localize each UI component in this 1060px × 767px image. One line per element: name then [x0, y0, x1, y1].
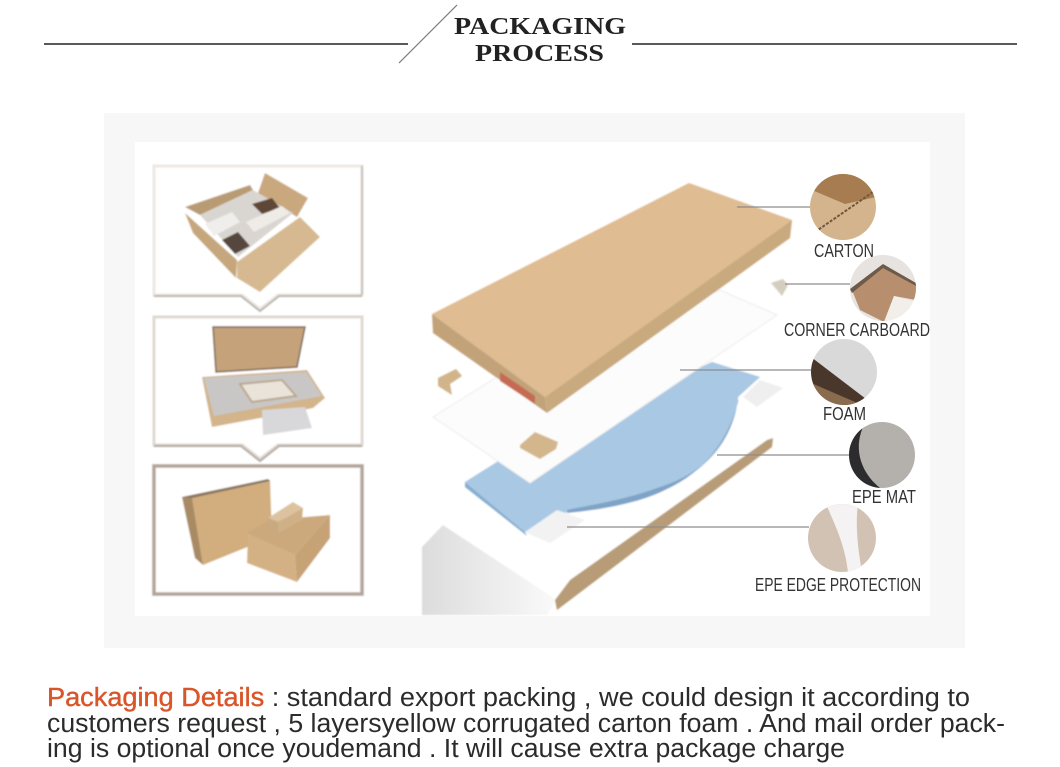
detail: carton: CARTON — [814, 241, 874, 261]
step 1 frame: open carton with goods — [154, 166, 362, 311]
detail: EPE mat: EPE MAT — [852, 487, 916, 507]
detail: corner carboard — [784, 255, 930, 340]
heading: packaging process: PROCESS — [475, 41, 604, 67]
text block: packaging details — [47, 684, 1005, 763]
detail: foam — [811, 339, 877, 424]
layer: carton edge strip — [555, 438, 773, 610]
carton top view — [432, 183, 792, 397]
detail: EPE edge protection — [755, 504, 921, 595]
heading: packaging process — [44, 5, 1017, 67]
layer: EPE mat — [443, 400, 773, 600]
step 3 frame: finished cartons — [154, 466, 362, 594]
detail: foam: FOAM — [823, 404, 866, 424]
layer: white sheet — [433, 290, 777, 483]
text block: packaging details: ing is optional once youdemand . It will cause extra package charge — [47, 735, 845, 763]
panel: packing step photos — [154, 166, 362, 594]
detail: corner carboard: CORNER CARBOARD — [784, 320, 930, 340]
layer: plastic bag — [422, 525, 557, 615]
detail: EPE edge protection: EPE EDGE PROTECTION — [755, 575, 921, 595]
panel: white image area — [135, 142, 930, 616]
detail: EPE mat — [849, 422, 916, 507]
panel: packaging image backdrop — [104, 113, 965, 648]
step 2 frame: opened flat box — [154, 317, 362, 461]
text block: packaging details: customers request , 5 layersyellow corrugated carton foam . And mail order pack- — [47, 710, 1005, 738]
leader lines — [567, 207, 850, 527]
cardboard corner pieces — [438, 369, 462, 395]
detail: carton — [810, 174, 876, 261]
EPE edge protection: white patches — [525, 510, 585, 543]
layer: blue foam — [465, 362, 760, 532]
exploded packaging diagram — [422, 183, 792, 615]
text block: packaging details: Packaging Details : standard export packing , we could design it according to — [47, 684, 970, 712]
heading: packaging process: PACKAGING — [454, 14, 626, 40]
